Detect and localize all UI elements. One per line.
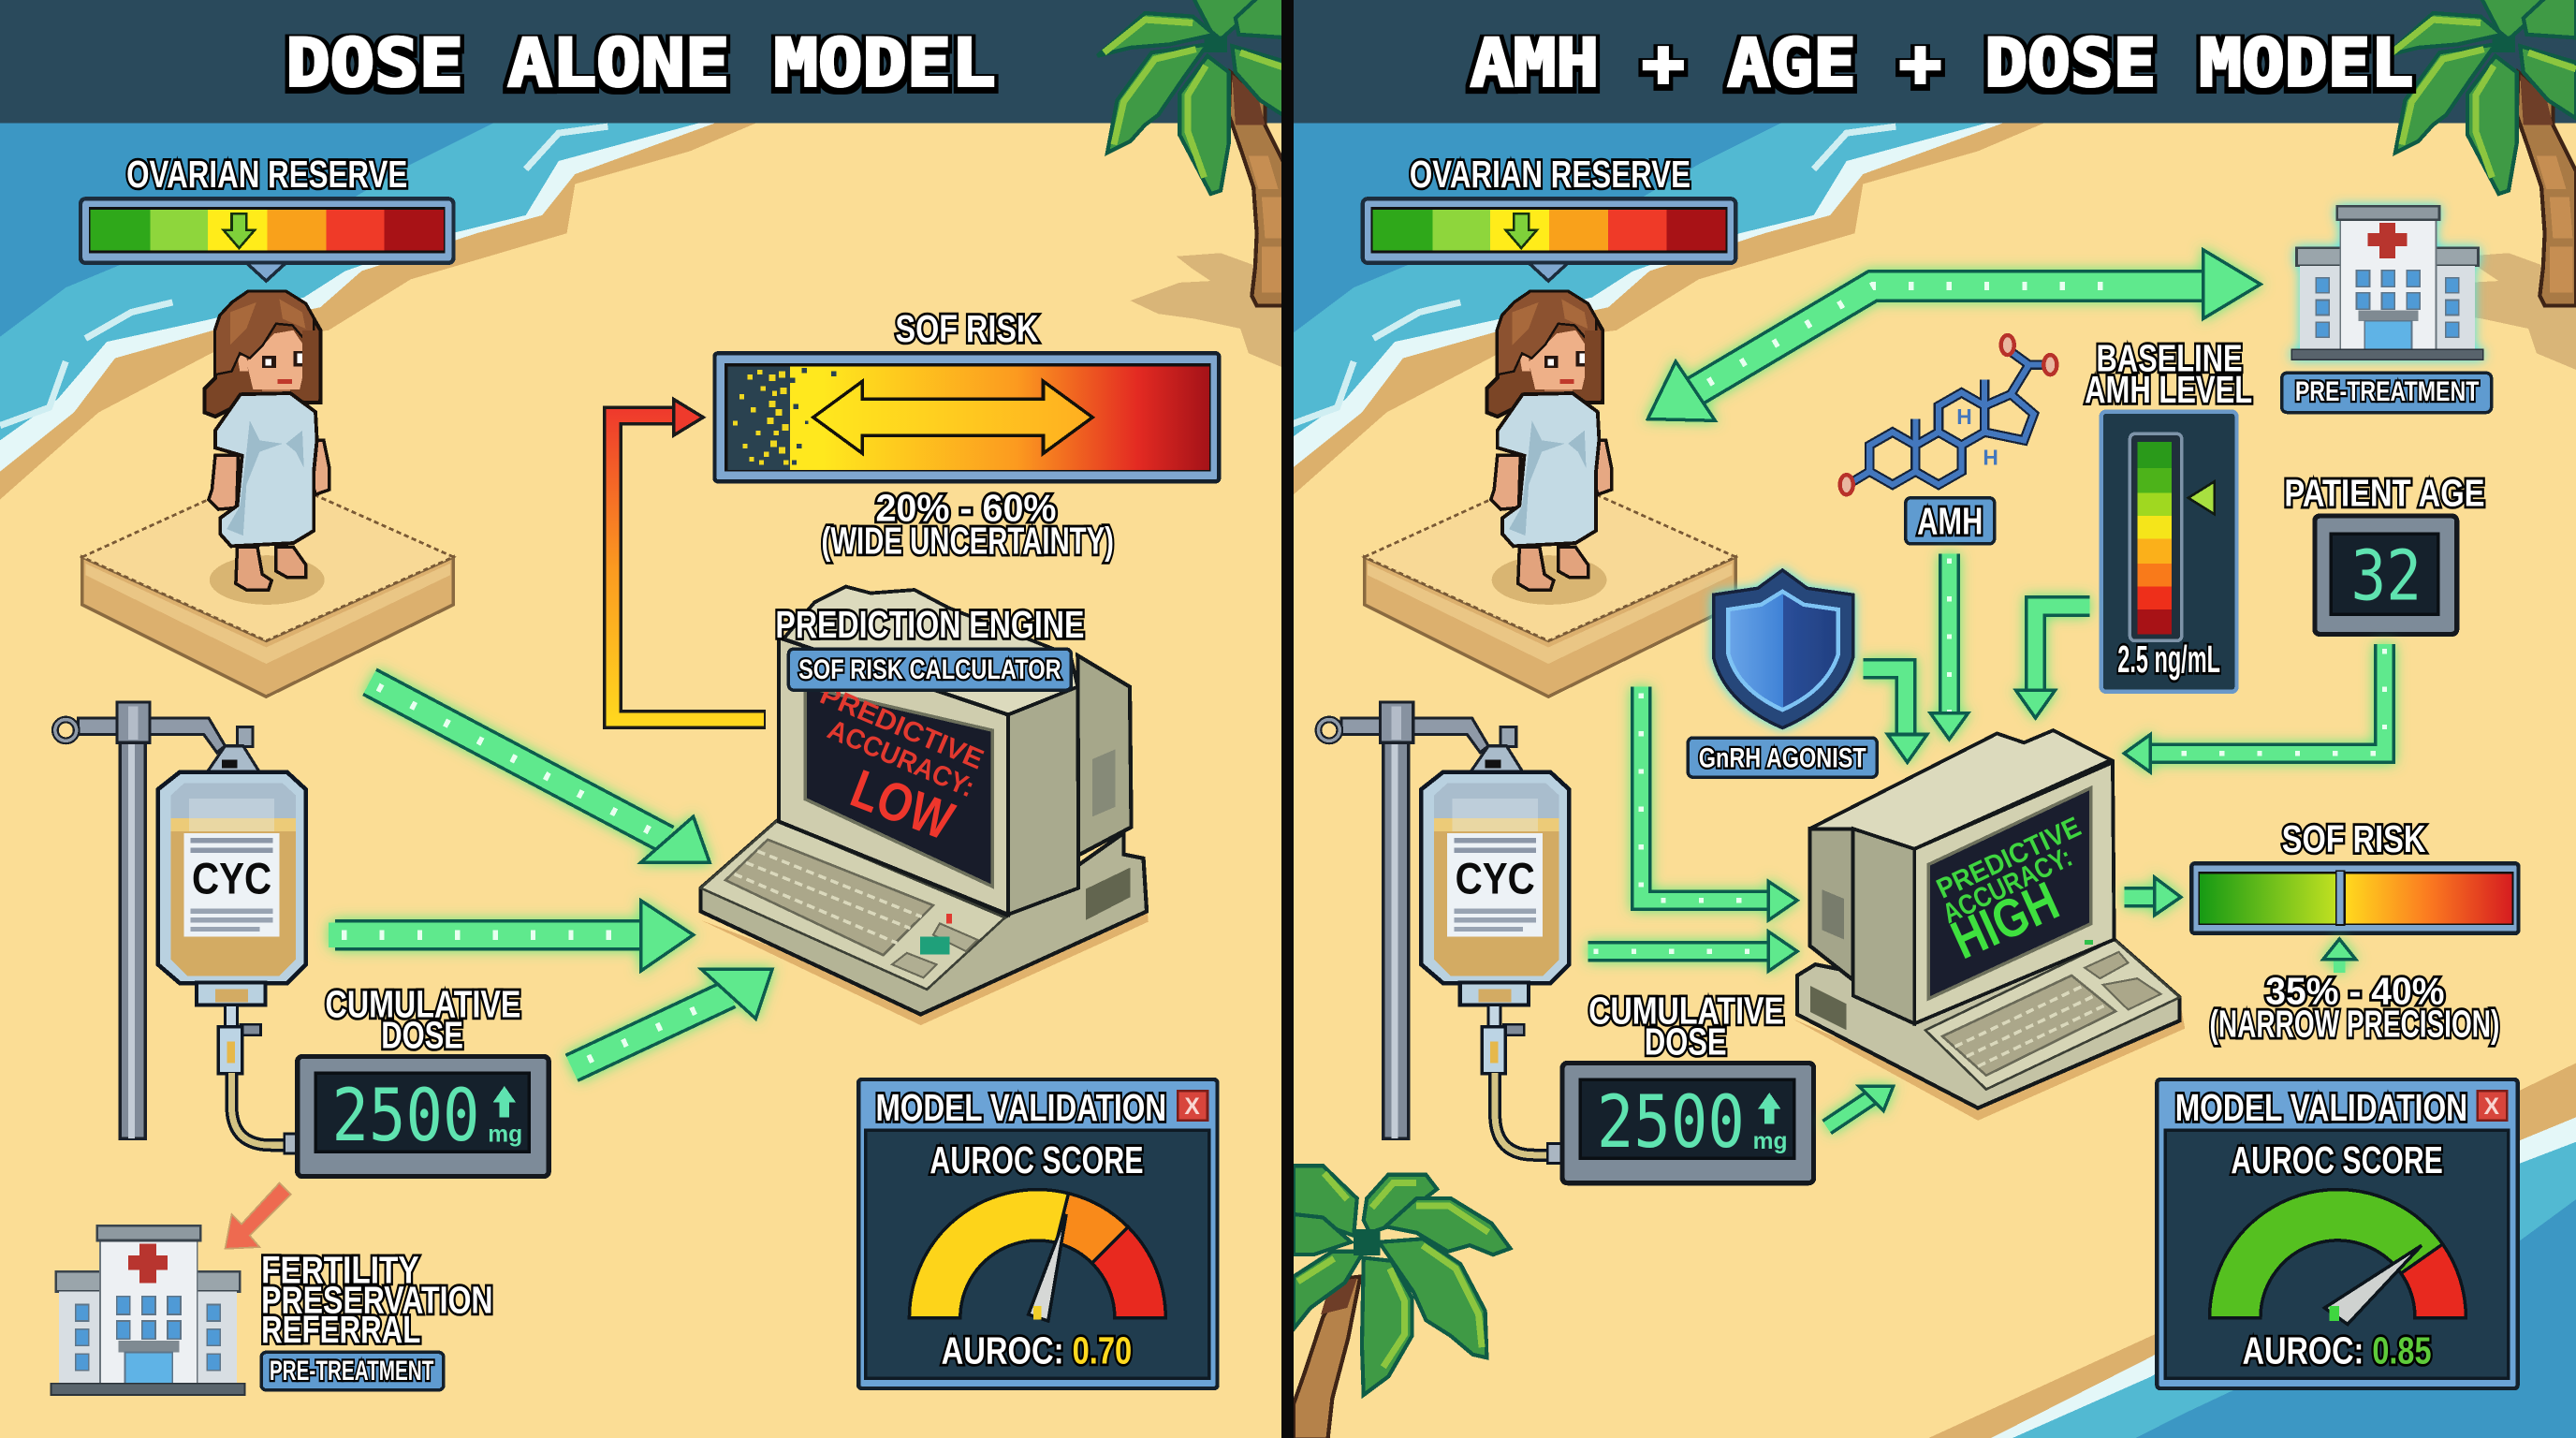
icon: GnRH shield — [1714, 570, 1853, 727]
palm tree — [1097, 0, 1288, 370]
IV tube — [1495, 1073, 1563, 1164]
badge: pre-treatment: PRE-TREATMENT — [2295, 376, 2479, 407]
badge: AMH: AMH — [1917, 499, 1983, 542]
label: patient age: PATIENT AGE — [2284, 472, 2485, 515]
sand platform — [1365, 473, 1735, 697]
drug label: CYC — [192, 855, 271, 904]
monitor back — [1077, 655, 1132, 855]
label: baseline AMH level: BASELINE — [2096, 337, 2243, 380]
dose display: mg — [1753, 1129, 1788, 1154]
badge: pre-treatment: PRE-TREATMENT — [270, 1356, 433, 1387]
validation title: MODEL VALIDATION — [2175, 1086, 2467, 1129]
label: SOF risk: SOF RISK — [896, 307, 1038, 350]
AMH molecule: H — [1956, 404, 1972, 429]
computer: high accuracy: HIGH — [1943, 871, 2068, 971]
label: fertility preservation referral: FERTILITY — [261, 1249, 419, 1292]
label: cumulative dose: CUMULATIVE — [1588, 989, 1784, 1032]
badge: GnRH agonist: GnRH AGONIST — [1699, 743, 1866, 774]
label: ovarian reserve: OVARIAN RESERVE — [126, 153, 407, 196]
keyboard keys — [725, 840, 933, 955]
IV tube — [232, 1073, 300, 1153]
patient age display: 32 — [2351, 537, 2422, 617]
SOF risk range text — [822, 486, 1114, 562]
arrow: engine to SOF risk — [613, 399, 766, 720]
label: baseline AMH level — [2085, 337, 2252, 411]
close button: X — [2484, 1094, 2500, 1120]
label: fertility preservation referral — [261, 1249, 493, 1351]
needle — [2324, 1245, 2422, 1325]
panel: dose alone model — [0, 0, 1288, 1395]
dose display: mg — [488, 1123, 522, 1148]
badge: SOF risk calculator: SOF RISK CALCULATOR — [798, 654, 1061, 685]
ovarian reserve meter — [1363, 198, 1735, 281]
arrow: referral — [225, 1183, 291, 1249]
patient figure — [1486, 292, 1612, 590]
badge: pre-treatment — [261, 1352, 444, 1390]
palm tree: bottom left — [1294, 1166, 1510, 1438]
AMH molecule — [1840, 335, 2056, 494]
arrow: age to computer — [2124, 644, 2384, 772]
validation title: MODEL VALIDATION — [875, 1086, 1166, 1129]
panel: AMH + age + dose model — [1288, 0, 2576, 1438]
arrow: AMH level to computer — [2015, 607, 2089, 718]
base — [701, 821, 1147, 1015]
sand platform — [82, 473, 453, 697]
needle — [1029, 1214, 1066, 1321]
monitor top — [781, 587, 1077, 714]
hospital icon — [51, 1225, 245, 1395]
close button — [2478, 1091, 2507, 1121]
header bar — [1294, 0, 2576, 124]
arrow: computer to SOF risk — [2124, 877, 2181, 916]
label: fertility preservation referral: PRESERVATION — [261, 1278, 493, 1321]
keyboard surface — [1925, 940, 2180, 1090]
computer: prediction engine: ACCURACY: — [823, 714, 979, 803]
computer shadow — [1793, 1010, 2185, 1121]
close button — [1178, 1091, 1208, 1121]
patient age display — [2315, 516, 2457, 634]
badge: pre-treatment — [2282, 373, 2492, 413]
arrow: AMH to computer — [1930, 553, 1969, 740]
SOF risk range text: 35% - 40% — [2265, 969, 2445, 1012]
label: baseline AMH level: AMH LEVEL — [2085, 368, 2252, 411]
scene: right beach and water — [1288, 124, 2576, 1438]
dose display — [298, 1056, 549, 1177]
arrow: patient to computer — [1641, 687, 1797, 920]
auroc score label: AUROC SCORE — [2231, 1138, 2443, 1181]
monitor side — [1008, 687, 1078, 915]
dose display: 2500 — [332, 1074, 480, 1158]
arrow: GnRH to computer — [1863, 668, 1927, 762]
label: cumulative dose — [326, 982, 520, 1057]
SOF risk range text — [2210, 969, 2499, 1045]
IV stand and bag — [55, 702, 306, 1138]
keyboard keys — [1942, 976, 2115, 1076]
IV stand and bag — [1318, 702, 1569, 1138]
gauge — [909, 1190, 1165, 1321]
hospital icon — [2291, 206, 2483, 360]
dose display: 2500 — [1597, 1080, 1745, 1165]
arrow: bidirectional patient to hospital — [1647, 250, 2261, 420]
computer: high accuracy — [1793, 730, 2185, 1121]
monitor back — [1809, 829, 1853, 980]
arrow: dose to engine — [572, 969, 772, 1068]
monitor side — [1853, 829, 1914, 1023]
keyboard surface — [701, 821, 1005, 990]
dither dots — [733, 370, 788, 465]
gauge — [2210, 1190, 2466, 1325]
SOF risk bar — [2191, 863, 2519, 933]
computer: high accuracy: PREDICTIVE — [1932, 812, 2086, 905]
arrow: precision marker — [2323, 939, 2356, 973]
computer: prediction engine: LOW — [843, 759, 961, 852]
label: cumulative dose — [1588, 989, 1784, 1064]
double arrow — [813, 381, 1092, 453]
SOF risk range text: (WIDE UNCERTAINTY) — [822, 519, 1114, 562]
auroc value: AUROC: 0.70 — [942, 1329, 1132, 1372]
dose display — [1562, 1064, 1814, 1183]
base — [1797, 940, 2180, 1108]
title: DOSE ALONE MODEL — [285, 24, 996, 101]
screen — [1928, 788, 2091, 999]
monitor front — [779, 638, 1008, 915]
AMH level meter: 2.5 ng/mL — [2117, 638, 2220, 681]
arrow: dose to computer — [1827, 1086, 1894, 1127]
scene: left beach and water — [0, 124, 755, 500]
title: AMH + AGE + DOSE MODEL — [1471, 24, 2413, 101]
label: cumulative dose: DOSE — [381, 1014, 463, 1057]
auroc value: AUROC: 0.85 — [2243, 1329, 2431, 1372]
badge: GnRH agonist — [1688, 738, 1877, 777]
computer shadow — [701, 903, 1149, 1025]
label: cumulative dose: CUMULATIVE — [326, 982, 520, 1025]
patient figure — [205, 292, 329, 590]
arrow: CYC to computer — [1588, 932, 1797, 971]
panel: model validation — [2157, 1079, 2518, 1388]
computer: high accuracy: ACCURACY: — [1938, 842, 2077, 930]
SOF risk range text: 20% - 60% — [875, 486, 1057, 529]
label: ovarian reserve: OVARIAN RESERVE — [1410, 153, 1690, 196]
label: cumulative dose: DOSE — [1645, 1020, 1727, 1064]
label: prediction engine: PREDICTION ENGINE — [775, 603, 1084, 646]
screen — [805, 687, 992, 887]
label: fertility preservation referral: REFERRAL — [261, 1308, 420, 1351]
badge: SOF risk calculator — [788, 649, 1071, 690]
auroc score label: AUROC SCORE — [929, 1138, 1144, 1181]
ovarian reserve meter — [80, 198, 453, 281]
computer: prediction engine — [701, 587, 1149, 1025]
computer: prediction engine: PREDICTIVE — [815, 679, 988, 776]
AMH molecule: H — [1983, 446, 1998, 470]
drug label: CYC — [1456, 855, 1535, 904]
arrow: patient to engine — [370, 682, 710, 862]
header bar — [0, 0, 1281, 124]
panel: model validation — [858, 1079, 1218, 1388]
close button: X — [1184, 1094, 1200, 1120]
monitor top — [1809, 730, 2111, 849]
arrow: CYC to engine — [329, 901, 694, 971]
AMH level meter — [2101, 412, 2237, 692]
monitor front — [1914, 762, 2115, 1023]
SOF risk bar — [714, 353, 1219, 481]
label: SOF risk: SOF RISK — [2282, 817, 2425, 860]
palm tree — [2385, 0, 2576, 370]
center divider — [1281, 0, 1294, 1438]
